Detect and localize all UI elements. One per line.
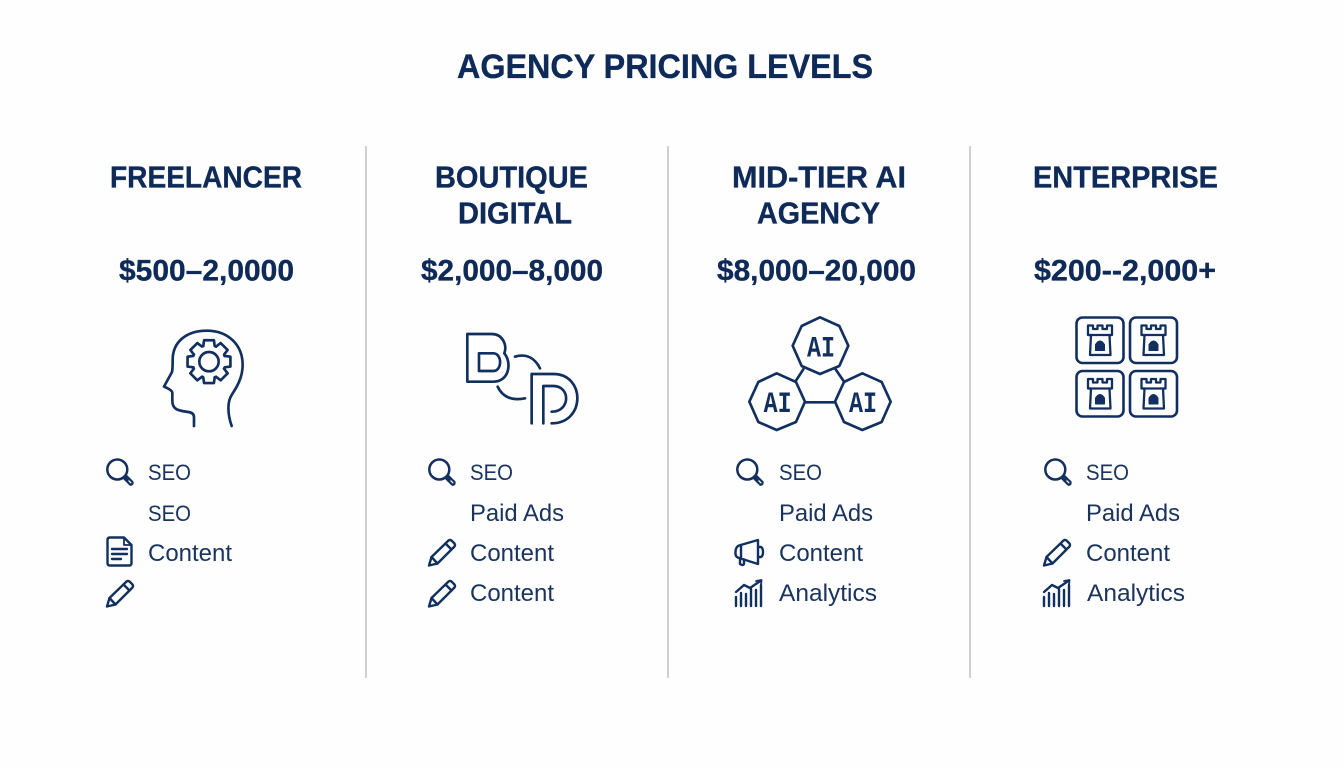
heading: boutique digital (435, 160, 588, 230)
item: Analytics: Analytics (779, 580, 877, 607)
icon: pencil second (429, 581, 455, 606)
item: Content: Content (148, 540, 232, 567)
item: Content: Content (470, 540, 554, 567)
icon: magnifier (107, 460, 133, 485)
price: freelancer: $500–2,0000 (119, 254, 294, 288)
icon: magnifier (1045, 460, 1071, 485)
panel: enterprise (1033, 160, 1218, 607)
icon: AI network (749, 317, 891, 430)
icon: magnifier (737, 460, 763, 485)
item: Content: Content (779, 540, 863, 567)
item: Analytics: Analytics (1087, 580, 1185, 607)
price: boutique digital: $2,000–8,000 (421, 254, 603, 288)
item: Paid Ads: Paid Ads (1086, 500, 1180, 527)
item: Paid Ads: Paid Ads (470, 500, 564, 527)
heading: boutique digital: BOUTIQUE (435, 160, 588, 194)
icon: magnifier (429, 460, 455, 485)
heading: enterprise: ENTERPRISE (1033, 160, 1218, 194)
price: mid-tier AI agency: $8,000–20,000 (717, 254, 916, 288)
title: AGENCY PRICING LEVELS (457, 48, 873, 86)
icon: analytics chart (736, 580, 762, 606)
icon: AI network: AI (807, 332, 835, 366)
panel: freelancer (107, 160, 302, 606)
item: Content second: Content (470, 580, 554, 607)
item: Content: Content (1086, 540, 1170, 567)
icon: pencil (107, 581, 133, 606)
heading: freelancer: FREELANCER (110, 160, 302, 194)
icon: four castle tiles (1076, 318, 1177, 416)
heading: boutique digital: DIGITAL (458, 196, 572, 230)
heading: mid-tier AI agency (732, 160, 906, 230)
icon: document (108, 538, 132, 566)
item: SEO: SEO (148, 460, 191, 485)
panel: boutique digital (421, 160, 603, 607)
icon: pencil (1044, 540, 1070, 566)
heading: mid-tier AI agency: MID-TIER AI (732, 160, 906, 194)
icon: analytics chart (1044, 580, 1070, 606)
price: enterprise: $200--2,000+ (1034, 254, 1216, 288)
item: SEO: SEO (1086, 460, 1129, 485)
column dividers (366, 146, 970, 678)
item: SEO: SEO (779, 460, 822, 485)
item: SEO: SEO (470, 460, 513, 485)
icon: AI network: AI (764, 388, 792, 422)
panel: mid-tier AI agency (717, 160, 916, 607)
icon: megaphone (735, 540, 763, 565)
heading: mid-tier AI agency: AGENCY (757, 196, 880, 230)
icon: AI network: AI (849, 388, 877, 422)
icon: B and D monogram (467, 334, 577, 423)
icon: head with gear (164, 331, 243, 426)
item: Paid Ads: Paid Ads (779, 500, 873, 527)
icon: pencil (429, 540, 455, 566)
item: SEO second: SEO (148, 501, 191, 526)
